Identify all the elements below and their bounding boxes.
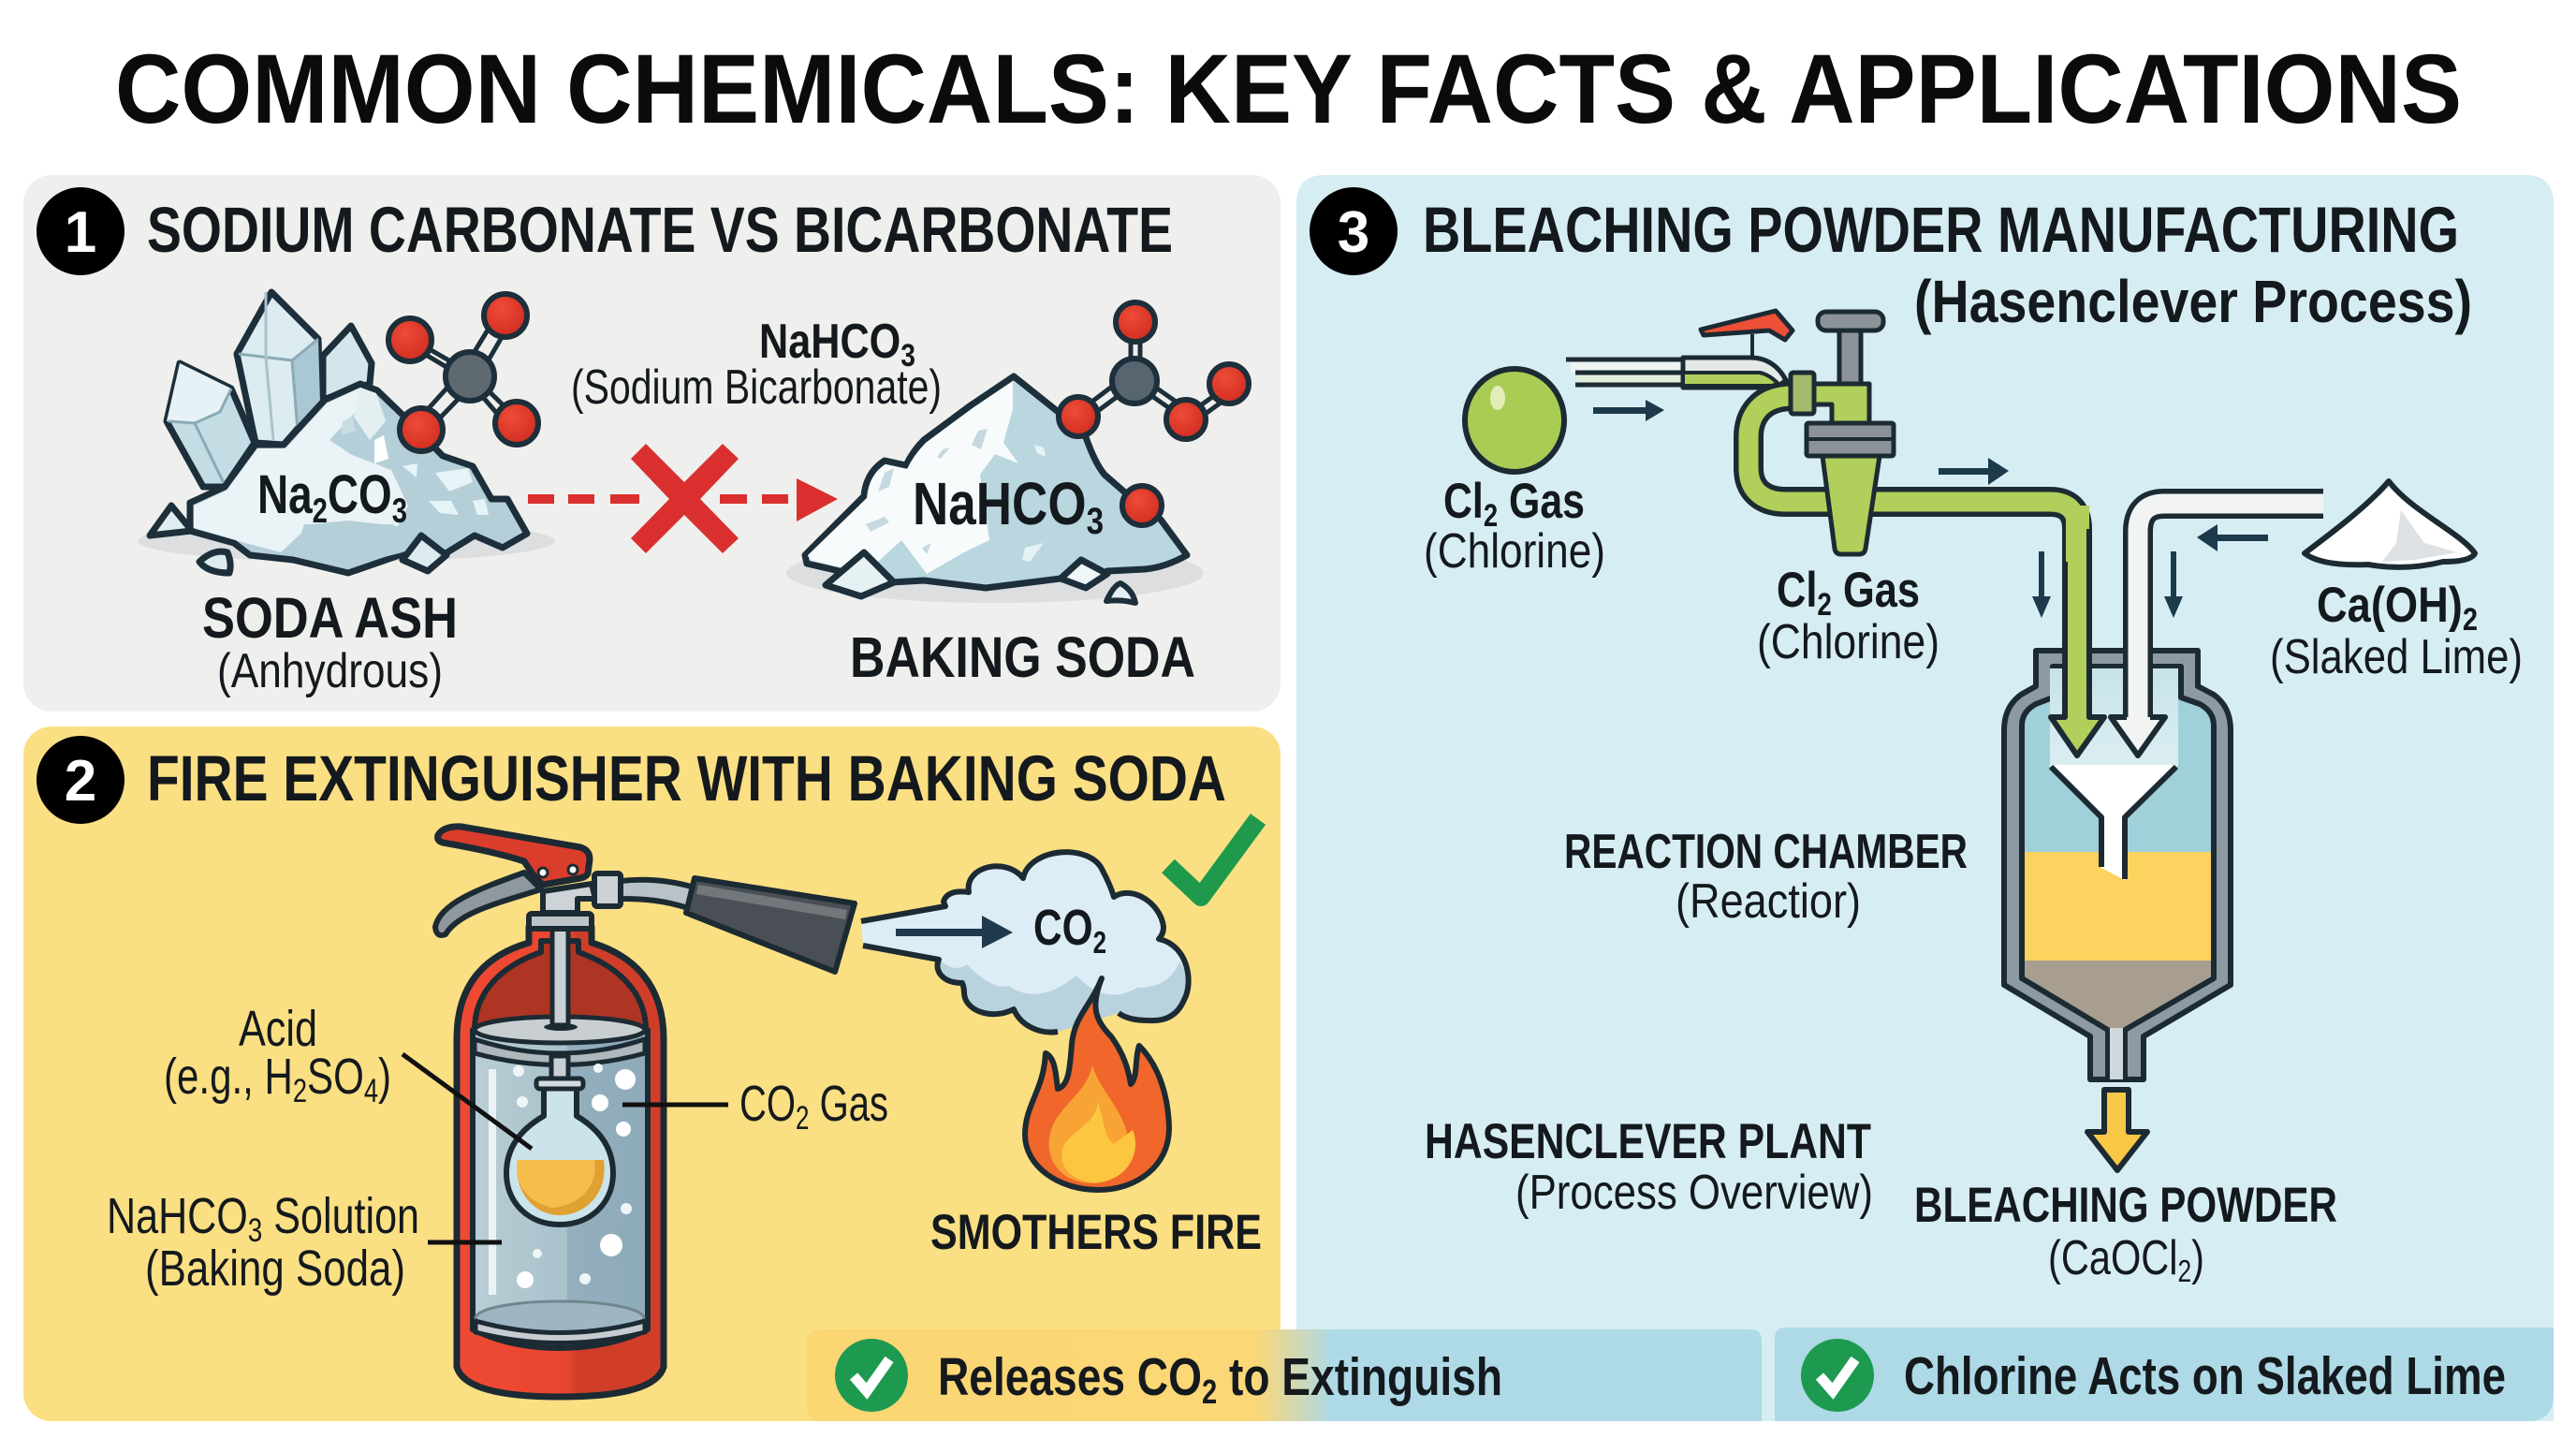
label: chlorine 2: (Chlorine): [1757, 615, 1939, 669]
label: Na2CO3: Na: [257, 464, 327, 525]
callout bar: releases CO2: [807, 1329, 1762, 1421]
number badge 3: 3: [1338, 200, 1369, 265]
label: smothers fire: SMOTHERS FIRE: [930, 1205, 1262, 1260]
label: Na2CO3: CO: [328, 464, 392, 525]
callout text: to Extinguish: [1217, 1347, 1502, 1407]
label: Ca(OH)2: 2: [2463, 602, 2478, 638]
arrow: output yellow: [2087, 1090, 2147, 1170]
callout bar: chlorine acts on slaked lime: [1775, 1328, 2554, 1421]
icon: chlorine gas sphere: [1465, 369, 1564, 472]
arrow: spray direction: [896, 916, 1013, 948]
number badge 2: [37, 736, 124, 824]
label: baking soda parenthetical: (Baking Soda): [145, 1240, 405, 1297]
label: slaked lime: (Slaked Lime): [2270, 630, 2523, 684]
icon: white lime pipe: [2111, 504, 2323, 756]
label: CO2 in cloud: CO: [1033, 900, 1109, 956]
callout text: 2: [1202, 1372, 1217, 1411]
label: H2SO4: (e.g., H: [164, 1049, 329, 1105]
label: soda ash: SODA ASH: [202, 586, 458, 650]
label: CaOCl2: (CaOCl: [2048, 1231, 2210, 1285]
label: Hasenclever plant: HASENCLEVER PLANT: [1425, 1114, 1871, 1169]
heading 1: SODIUM CARBONATE VS BICARBONATE: [147, 194, 1173, 266]
label: CO2 gas: CO: [739, 1076, 815, 1132]
label: H2SO4: 2: [293, 1073, 307, 1109]
icon: reaction chamber: [2004, 506, 2231, 1079]
number badge 2: 2: [65, 749, 96, 814]
number badge 1: 1: [65, 200, 96, 265]
callout line: CO2 gas: [622, 1103, 728, 1107]
icon: baking soda pile: [786, 376, 1204, 603]
icon: bicarbonate molecule: [1059, 302, 1249, 525]
label: Ca(OH)2: Ca(OH): [2317, 578, 2488, 633]
arrows: flow direction: [1593, 400, 2268, 618]
heading 2: FIRE EXTINGUISHER WITH BAKING SODA: [147, 742, 1226, 814]
label: H2SO4: ): [378, 1049, 391, 1105]
icon: slaked lime pile: [2305, 481, 2475, 567]
panel: bleaching powder manufacturing: [1296, 175, 2554, 1421]
label: acid: Acid: [239, 1001, 317, 1057]
label: sodium bicarbonate: (Sodium Bicarbonate): [571, 360, 942, 415]
title: COMMON CHEMICALS: KEY FACTS & APPLICATIONS: [115, 35, 2462, 144]
label: H2SO4: SO: [307, 1049, 364, 1105]
label: CaOCl2: 2: [2177, 1254, 2191, 1288]
label: reactor: (Reactior): [1676, 874, 1861, 929]
label: Cl2 gas 1: Cl: [1443, 474, 1493, 529]
label: CO2 in cloud: 2: [1093, 925, 1106, 960]
icon: check badge: [1801, 1339, 1874, 1412]
label: CO2 gas: Gas: [809, 1076, 888, 1132]
label: Cl2 gas 1: 2: [1484, 498, 1498, 534]
callout text: Releases CO: [938, 1347, 1265, 1407]
label: CaOCl2: ): [2191, 1231, 2204, 1285]
label: NaHCO3 formula: 3: [900, 338, 915, 374]
panel: fire extinguisher: [23, 726, 1281, 1421]
label: NaHCO3 solution: NaHCO: [107, 1188, 284, 1244]
arrow: dashed crossed-out: [528, 444, 838, 553]
label: anhydrous: (Anhydrous): [217, 644, 443, 698]
icon: green check: [1168, 819, 1258, 897]
icon: fire extinguisher: [435, 827, 855, 1397]
label: baking soda: BAKING SODA: [850, 625, 1195, 689]
callout line: NaHCO3 solution: [428, 1240, 502, 1245]
icon: carbonate molecule: [388, 294, 538, 451]
label: process overview: (Process Overview): [1515, 1166, 1873, 1220]
label: Na2CO3: 2: [313, 492, 328, 530]
subheading: Hasenclever process: (Hasenclever Process): [1914, 268, 2472, 335]
icon: valve assembly and chlorine pipe: [1566, 311, 2077, 721]
label: NaHCO3 solution: Solution: [262, 1188, 419, 1244]
label: Cl2 gas 2: 2: [1817, 587, 1832, 623]
label: Cl2 gas 1: Gas: [1498, 474, 1585, 529]
label: reaction chamber: REACTION CHAMBER: [1564, 825, 1968, 879]
number badge 1: [37, 187, 124, 275]
label: NaHCO3 solution: 3: [248, 1212, 262, 1249]
label: H2SO4: 4: [364, 1073, 378, 1109]
label: CO2 gas: 2: [796, 1100, 809, 1137]
label: NaHCO3 on pile: 3: [1087, 501, 1104, 542]
icon: flame: [1025, 978, 1169, 1190]
label: NaHCO3 on pile: NaHCO: [913, 470, 1122, 537]
icon: soda ash pile with crystals: [138, 292, 555, 573]
label: bleaching powder: BLEACHING POWDER: [1914, 1178, 2337, 1233]
icon: CO2 cloud and spray: [861, 852, 1189, 1033]
icon: check badge: [835, 1339, 908, 1412]
label: chlorine 1: (Chlorine): [1424, 524, 1605, 579]
label: Cl2 gas 2: Cl: [1777, 563, 1826, 618]
callout line: acid: [402, 1054, 532, 1149]
label: Na2CO3: 3: [392, 492, 407, 530]
number badge 3: [1310, 187, 1398, 275]
panel: sodium carbonate vs bicarbonate: [23, 175, 1281, 712]
label: Cl2 gas 2: Gas: [1832, 563, 1920, 618]
label: NaHCO3 formula: NaHCO: [759, 315, 929, 369]
